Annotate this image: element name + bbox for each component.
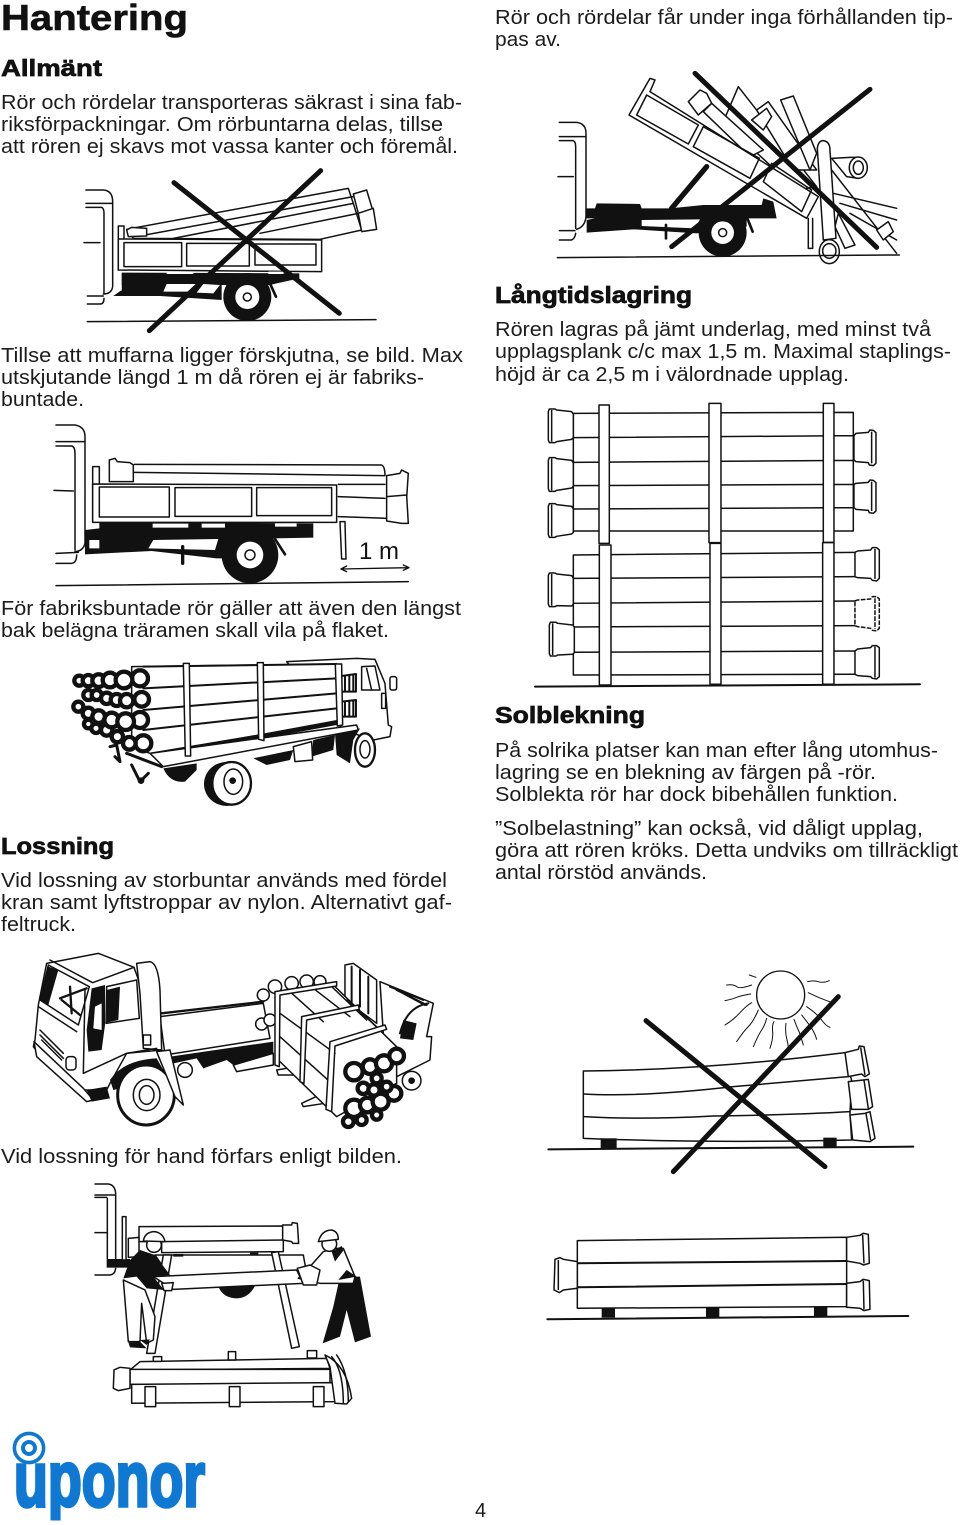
text block: Solblekning paragraph 2: antal rörstöd används. <box>495 862 707 884</box>
right upper socket 1 <box>854 430 876 466</box>
left lower socket 1 <box>548 573 573 607</box>
text block: Solblekning paragraph 1 <box>495 740 938 806</box>
caption: hand unloading: Vid lossning för hand förfars enligt bilden. <box>1 1146 402 1168</box>
logo: Uponor: uponor <box>14 1435 205 1523</box>
pipe bundle on ground <box>113 1351 352 1407</box>
text block: Allmänt: att rören ej skavs mot vassa kanter och föremål. <box>1 136 458 158</box>
page number: 4 <box>475 1500 486 1522</box>
heading: Solblekning: Solblekning <box>495 702 645 728</box>
pipes behind <box>256 975 326 1030</box>
illustration: forklift unloading truck <box>33 953 433 1127</box>
right lower socket 2 <box>855 597 879 631</box>
left upper socket 2 <box>548 458 573 491</box>
text block: Allmänt: Rör och rördelar transporteras säkrast i sina fab- <box>1 92 462 114</box>
text block: factory bundles <box>1 598 461 642</box>
text block: Lossning: kran samt lyftstroppar av nylon. Alternativt gaf- <box>1 892 452 914</box>
illustration: correctly supported pipes <box>547 1233 908 1319</box>
text block: Solblekning paragraph 1: lagring se en blekning av färgen på -rör. <box>495 762 876 784</box>
pipe ends <box>343 1049 404 1127</box>
heading: Lossning: Lossning <box>1 833 114 859</box>
dimension label: 1 m <box>359 538 399 565</box>
text block: Långtidslagring: höjd är ca 2,5 m i välordnade upplag. <box>495 364 849 386</box>
bundle <box>278 983 397 1117</box>
forks <box>277 1067 297 1075</box>
text block: staggered sockets: Tillse att muffarna ligger förskjutna, se bild. Max <box>1 345 463 367</box>
text block: Solblekning paragraph 1: Solblekta rör har dock bibehållen funktion. <box>495 784 898 806</box>
heading: Allmänt: Allmänt <box>1 55 102 81</box>
illustration: truck with 1 m overhang <box>54 425 409 586</box>
text block: Långtidslagring: Rören lagras på jämt underlag, med minst två <box>495 319 932 341</box>
text block: staggered sockets: buntade. <box>1 389 84 411</box>
text block: Lossning: feltruck. <box>1 914 76 936</box>
left lower socket 2 <box>549 622 574 656</box>
right lower socket 3 <box>855 646 879 679</box>
left upper socket 1 <box>548 409 573 443</box>
illustration: sun bleaching crossed out <box>548 971 913 1172</box>
right lower socket 1 <box>855 548 879 581</box>
fender and wheel <box>110 1058 183 1105</box>
text block: staggered sockets: utskjutande längd 1 m då rören ej är fabriks- <box>1 367 424 389</box>
text block: Allmänt: riksförpackningar. Om rörbuntarna delas, tillse <box>1 114 443 136</box>
illustration: tipping truck crossed out <box>557 73 899 264</box>
right upper socket 2 <box>854 480 876 513</box>
text block: Solblekning paragraph 2: ”Solbelastning” kan också, vid dåligt upplag, <box>495 818 923 840</box>
illustration: loaded truck rear view <box>73 658 397 806</box>
forklift <box>345 963 377 1023</box>
text block: Långtidslagring <box>495 319 951 386</box>
heading: Långtidslagring: Långtidslagring <box>495 282 692 308</box>
frames <box>275 982 337 1067</box>
left upper socket 3 <box>548 504 573 537</box>
text block: tipping warning <box>495 7 953 51</box>
illustration: truck with staggered pipes crossed out <box>84 171 377 331</box>
illustration: pipe stack in frames <box>535 403 920 687</box>
illustration: unloading by hand <box>95 1184 371 1407</box>
stakes <box>183 663 191 756</box>
text block: factory bundles: För fabriksbuntade rör gäller att även den längst <box>1 598 461 620</box>
text block: staggered sockets <box>1 345 463 411</box>
text block: Allmänt <box>1 92 462 158</box>
text block: Långtidslagring: upplagsplank c/c max 1,5 m. Maximal staplings- <box>495 341 951 363</box>
text block: Solblekning paragraph 2: göra att rören kröks. Detta undviks om tillräckligt <box>495 840 958 862</box>
text block: tipping warning: pas av. <box>495 29 561 51</box>
flatbed <box>160 1003 270 1055</box>
cab <box>33 953 162 1090</box>
text block: Solblekning paragraph 1: På solrika platser kan man efter lång utomhus- <box>495 740 938 762</box>
text block: Lossning <box>1 870 452 936</box>
text block: factory bundles: bak belägna träramen skall vila på flaket. <box>1 620 389 642</box>
worker right <box>297 1230 371 1343</box>
text block: Solblekning paragraph 2 <box>495 818 958 884</box>
text block: Lossning: Vid lossning av storbuntar används med fördel <box>1 870 447 892</box>
worker left <box>123 1232 173 1348</box>
text block: tipping warning: Rör och rördelar får under inga förhållanden tip- <box>495 7 953 29</box>
pipe ends <box>73 670 151 751</box>
logo: Uponor <box>0 1433 215 1525</box>
